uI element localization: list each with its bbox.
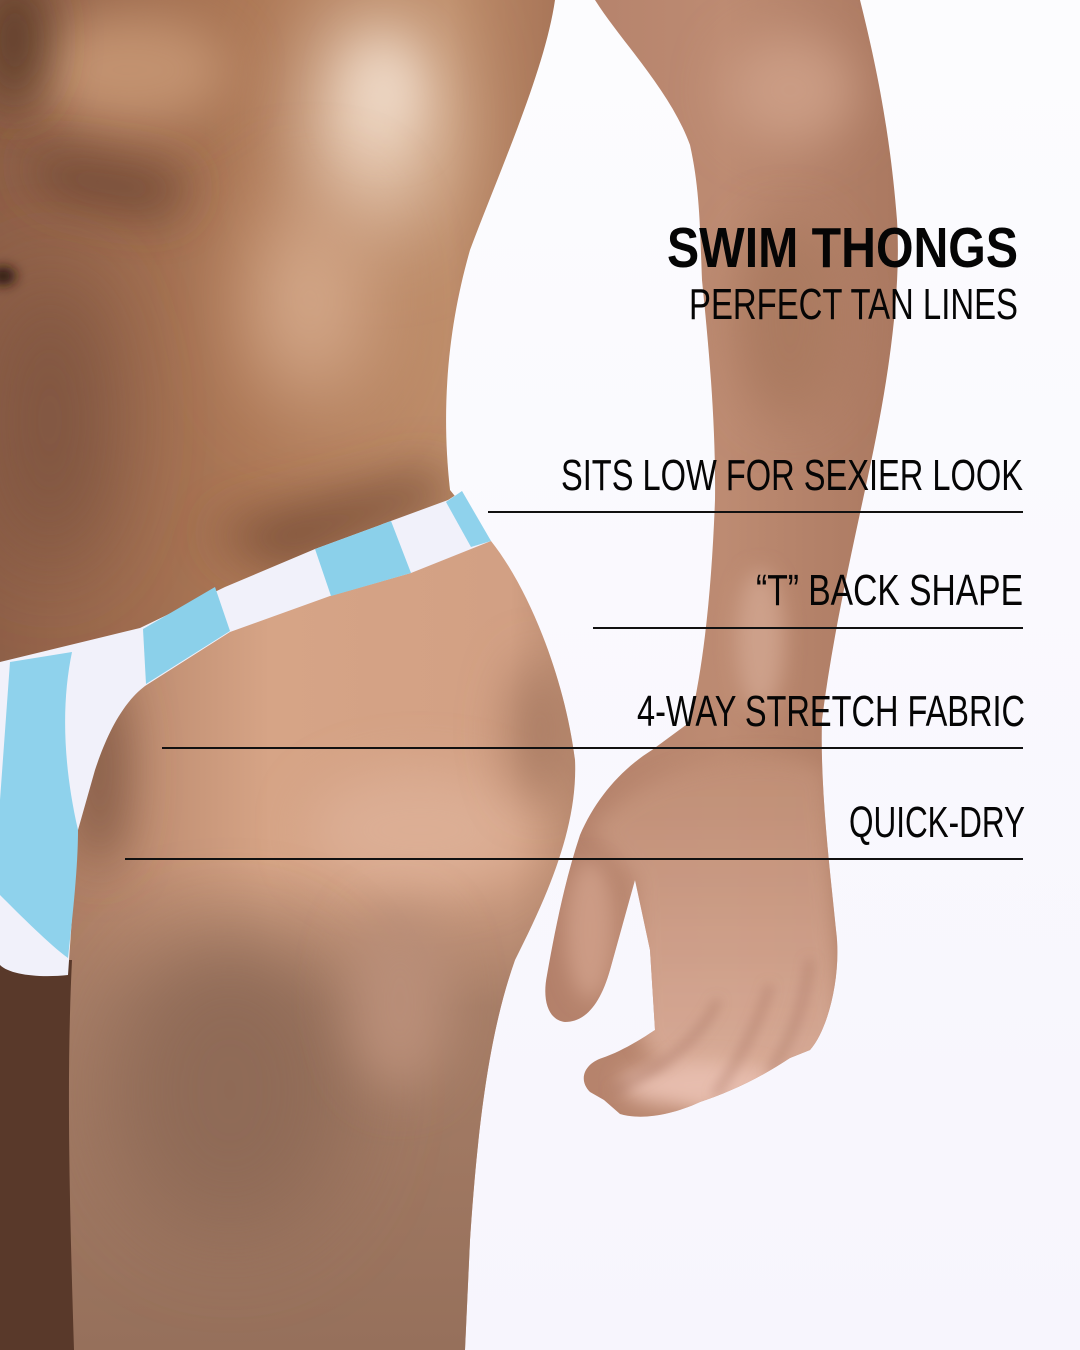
heading: SWIM THONGS bbox=[667, 216, 1018, 280]
arm and hand bbox=[540, 0, 910, 1130]
swim thong garment bbox=[0, 491, 491, 976]
hip and thigh bbox=[0, 500, 600, 1350]
figure: torso, hip and leg bbox=[0, 0, 600, 1350]
inner leg bbox=[0, 960, 74, 1350]
title bbox=[667, 216, 1018, 329]
front blue panel bbox=[0, 652, 78, 958]
finger creases bbox=[612, 960, 810, 1095]
waistband blue stripe right bbox=[446, 491, 491, 547]
waistband blue stripe left bbox=[143, 587, 230, 684]
waistband blue stripe middle bbox=[315, 521, 411, 596]
torso bbox=[0, 0, 560, 700]
waistband white base bbox=[0, 491, 491, 976]
